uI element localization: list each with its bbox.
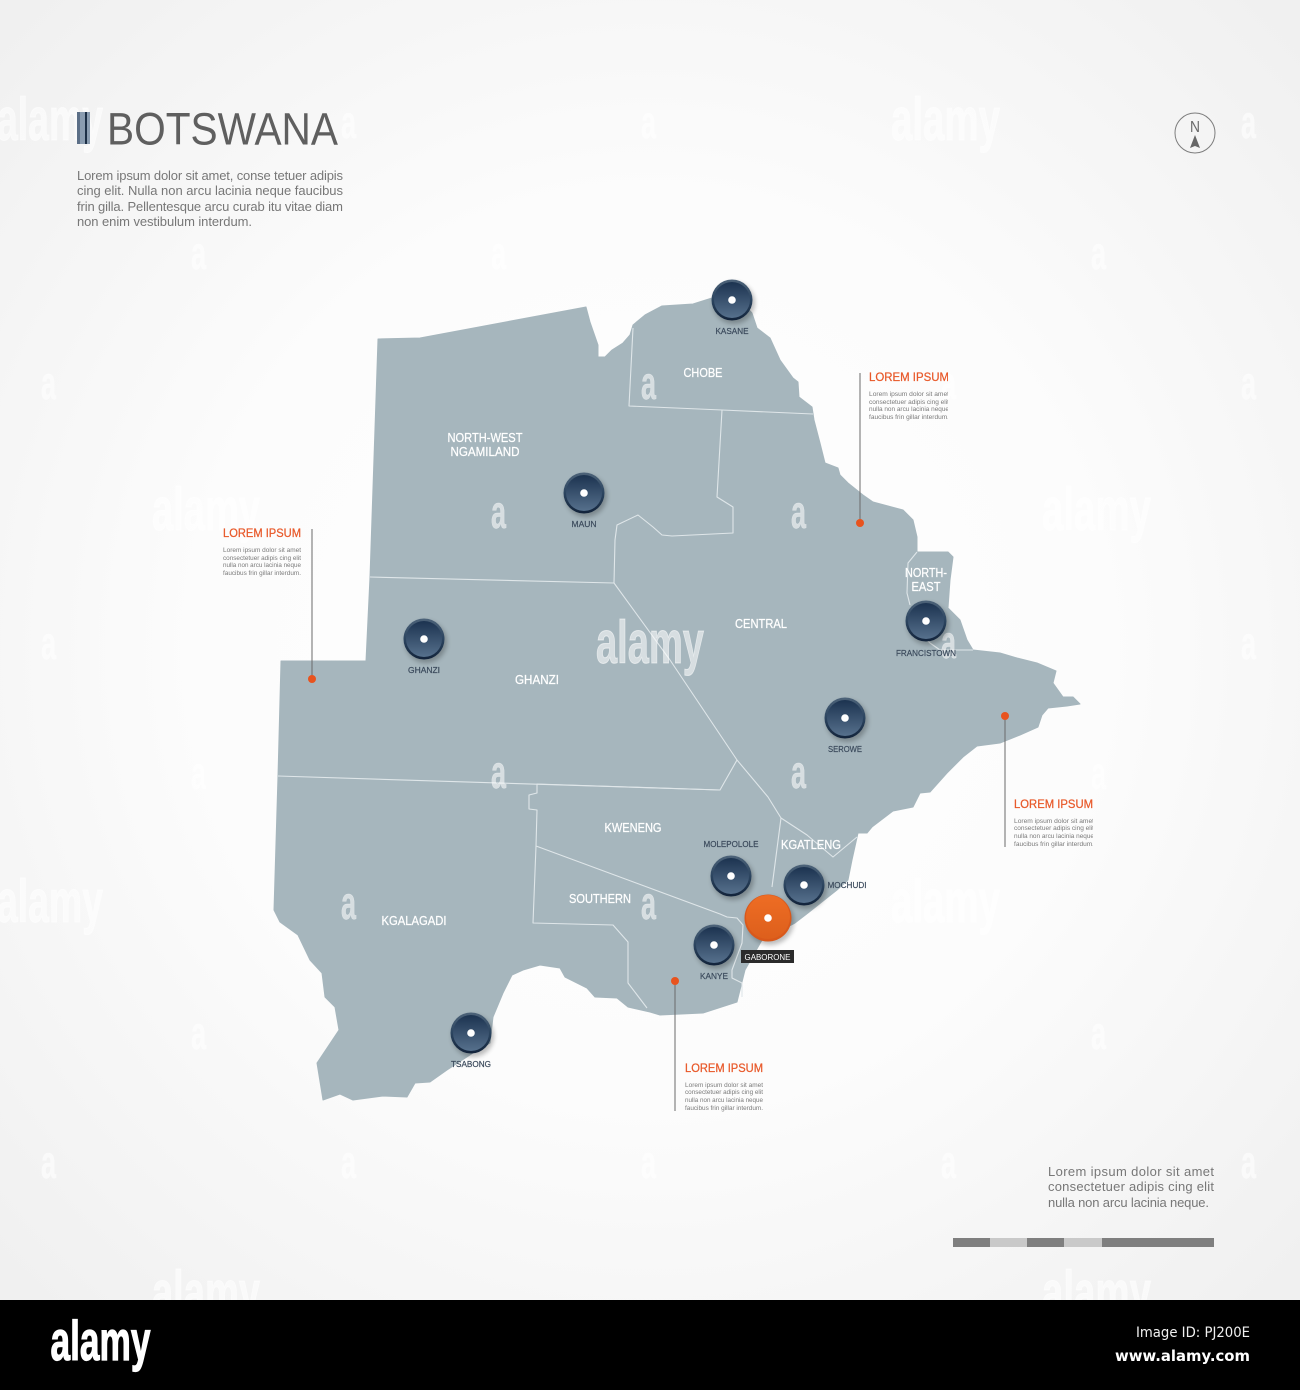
background watermarks: a	[191, 227, 206, 279]
background watermarks: alamy	[891, 868, 1000, 935]
bottom-right note: nulla non arcu lacinia neque.	[1048, 1195, 1209, 1210]
bottom-right note: Lorem ipsum dolor sit amet	[1048, 1164, 1214, 1179]
pin: Ghanzi	[404, 618, 447, 675]
map watermarks: a	[491, 746, 506, 798]
callout: east: LOREM IPSUM	[1014, 797, 1093, 811]
map watermarks: a	[491, 486, 506, 538]
background watermarks: a	[641, 1136, 656, 1188]
pin: Gaborone capital: GABORONE	[744, 952, 791, 962]
background watermarks: alamy	[1042, 1259, 1151, 1326]
bottom-right note: consectetuer adipis cing elit	[1048, 1179, 1214, 1194]
map watermarks: a	[641, 877, 656, 929]
pin: Kasane	[712, 280, 755, 336]
pin: Serowe	[824, 698, 868, 754]
district labels: NORTH-	[905, 566, 947, 580]
pin: Kanye: KANYE	[700, 971, 728, 981]
compass: N	[1190, 119, 1200, 136]
district labels: SOUTHERN	[569, 892, 631, 906]
background watermarks: a	[1241, 617, 1256, 669]
background watermarks: alamy	[152, 476, 260, 543]
callout: east: Lorem ipsum dolor sit amet	[1014, 818, 1094, 825]
website: www.alamy.com	[1115, 1347, 1250, 1365]
pin: Ghanzi: GHANZI	[408, 665, 440, 675]
pin: Kasane: KASANE	[716, 326, 749, 336]
pin: Kanye	[694, 924, 737, 981]
callout: north: nulla non arcu lacinia neque	[869, 406, 949, 413]
pin: Maun: MAUN	[572, 519, 596, 529]
background watermarks: a	[341, 96, 356, 148]
map watermarks: a	[941, 616, 956, 668]
callout: east: consectetuer adipis cing elit	[1014, 825, 1094, 832]
background watermarks: a	[641, 96, 656, 148]
district labels: GHANZI	[515, 673, 559, 687]
background watermarks: a	[41, 617, 56, 669]
footer logo: alamy	[50, 1309, 150, 1372]
callout: north: faucibus frin gillar interdum.	[869, 414, 949, 421]
pin: Mochudi: MOCHUDI	[828, 880, 866, 890]
country shape	[274, 295, 1080, 1100]
district labels: EAST	[912, 580, 941, 594]
pin: Serowe: SEROWE	[828, 744, 862, 754]
image id: Image ID: PJ200E	[1136, 1325, 1250, 1341]
intro text: non enim vestibulum interdum.	[77, 214, 252, 229]
background watermarks: a	[341, 1136, 356, 1188]
background watermarks: a	[1091, 747, 1106, 799]
pin: Gaborone capital	[741, 894, 794, 963]
pin: Molepolole: MOLEPOLOLE	[704, 839, 759, 849]
map watermarks: a	[791, 486, 806, 538]
pin: Francistown: FRANCISTOWN	[896, 648, 956, 658]
callout: east	[1001, 712, 1094, 848]
district labels	[382, 366, 947, 928]
callout: west: consectetuer adipis cing elit	[223, 555, 301, 562]
background watermarks: a	[1091, 1007, 1106, 1059]
map watermarks: a	[341, 877, 356, 929]
heading: Botswana: BOTSWANA	[107, 104, 338, 154]
callout: south: nulla non arcu lacinia neque	[685, 1097, 763, 1104]
bottom-right note	[1048, 1164, 1214, 1210]
center watermark: alamy	[596, 609, 704, 676]
background watermarks: a	[41, 1136, 56, 1188]
scale bar	[953, 1238, 1214, 1247]
background watermarks: a	[941, 357, 956, 409]
callout: north: Lorem ipsum dolor sit amet	[869, 391, 949, 398]
callout: east: faucibus frin gillar interdum.	[1014, 841, 1094, 848]
background watermarks: a	[1241, 96, 1256, 148]
intro text: Lorem ipsum dolor sit amet, conse tetuer adipis	[77, 168, 344, 183]
footer bar	[0, 1300, 1300, 1390]
district labels: KWENENG	[604, 821, 662, 835]
callout: east: nulla non arcu lacinia neque	[1014, 833, 1094, 840]
title icon	[77, 112, 90, 144]
compass	[1175, 113, 1215, 153]
district borders	[278, 328, 973, 1008]
callout: south	[671, 977, 763, 1112]
map watermarks: a	[641, 357, 656, 409]
background watermarks: a	[1241, 357, 1256, 409]
pin: Francistown	[896, 600, 956, 658]
district labels: KGALAGADI	[382, 914, 446, 928]
district labels: KGATLENG	[781, 838, 841, 852]
background watermarks: a	[1241, 1136, 1256, 1188]
background watermarks: a	[491, 227, 506, 279]
intro text: frin gilla. Pellentesque arcu curab itu vitae diam	[77, 199, 343, 214]
callout: south: faucibus frin gillar interdum.	[685, 1105, 763, 1112]
background watermarks: alamy	[0, 868, 103, 935]
title block	[77, 104, 344, 229]
callout: west: faucibus frin gillar interdum.	[223, 570, 301, 577]
background watermarks: a	[41, 357, 56, 409]
callout: west: LOREM IPSUM	[223, 526, 301, 540]
callout: west: Lorem ipsum dolor sit amet	[223, 547, 301, 554]
callout: south: consectetuer adipis cing elit	[685, 1089, 763, 1096]
callout: north: consectetuer adipis cing elit	[869, 399, 949, 406]
intro text	[77, 168, 344, 229]
pin: Mochudi	[784, 864, 866, 909]
intro text: cing elit. Nulla non arcu lacinia neque faucibus	[77, 183, 344, 198]
pin: Maun	[564, 472, 607, 529]
map watermarks	[341, 357, 956, 929]
background watermarks: alamy	[1042, 476, 1151, 543]
callout: south: Lorem ipsum dolor sit amet	[685, 1082, 763, 1089]
background watermarks: alamy	[152, 1259, 260, 1326]
district labels: CENTRAL	[735, 617, 787, 631]
background watermarks: alamy	[891, 86, 1000, 153]
pin: Molepolole	[704, 839, 759, 900]
callout: north: LOREM IPSUM	[869, 370, 949, 384]
map watermarks: a	[791, 746, 806, 798]
background watermarks: a	[1091, 227, 1106, 279]
background watermarks: a	[941, 1136, 956, 1188]
map of Botswana	[274, 295, 1080, 1100]
pin: Tsabong	[450, 1012, 494, 1069]
callout: west: nulla non arcu lacinia neque	[223, 562, 301, 569]
background watermarks: a	[191, 747, 206, 799]
callout: west	[223, 526, 316, 683]
district labels: NORTH-WEST	[448, 431, 523, 445]
callout: north	[856, 370, 949, 527]
background watermarks: a	[191, 1007, 206, 1059]
callout: south: LOREM IPSUM	[685, 1061, 763, 1075]
district labels: NGAMILAND	[450, 445, 520, 459]
pin: Tsabong: TSABONG	[451, 1059, 491, 1069]
district labels: CHOBE	[684, 366, 722, 380]
background watermarks: alamy	[0, 86, 103, 153]
